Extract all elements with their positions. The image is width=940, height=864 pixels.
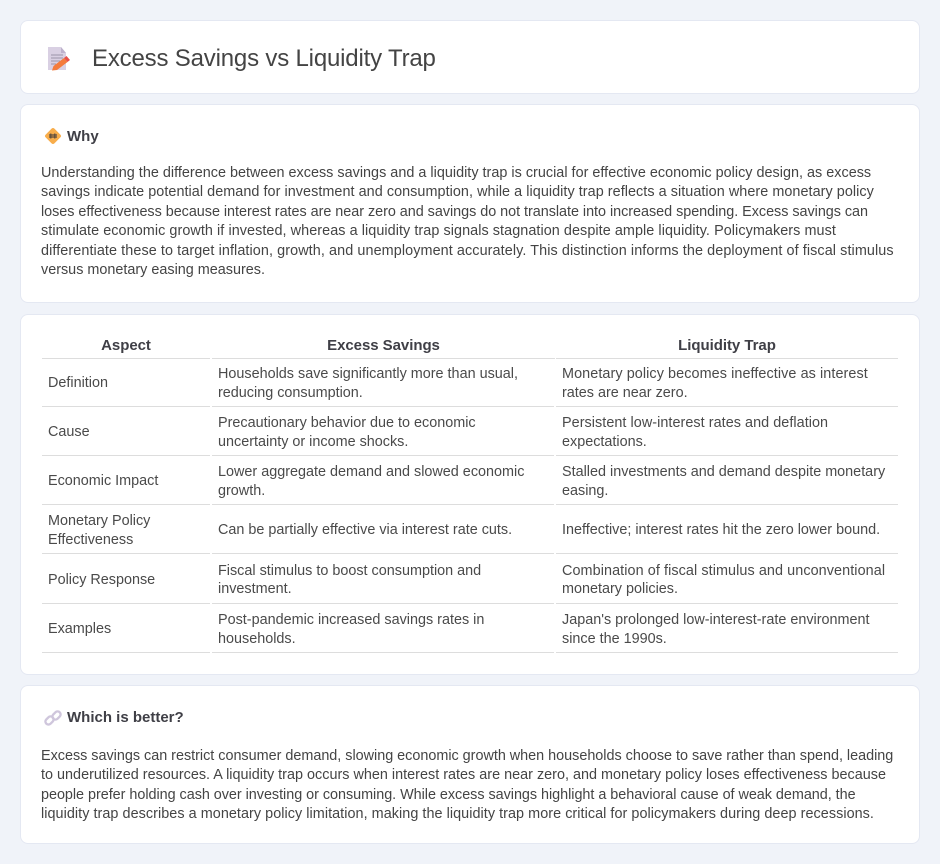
row: cause: Cause <box>48 424 90 440</box>
text block: why explanation: stimulate economic growth if invested, whereas a liquidity trap signals stagnation despite ample liquidity. Policymakers must <box>41 223 836 239</box>
comparison table: households. <box>218 630 296 646</box>
text block: verdict: liquidity trap describes a monetary policy limitation, making the liquidity trap more critical for policymakers during deep recessions. <box>41 806 874 822</box>
comparison table: since the 1990s. <box>562 630 667 646</box>
row: policy response <box>42 554 210 604</box>
text block: why explanation: differentiate these to target inflation, growth, and unemployment accurately. This distinction informs the deployment of fiscal stimulus <box>41 243 894 259</box>
comparison table: Combination of fiscal stimulus and unconventional <box>562 563 885 579</box>
icon: diamond warning sign <box>45 128 61 144</box>
comparison table: Japan's prolonged low-interest-rate environment <box>562 612 870 628</box>
text block: why explanation: savings indicate potential demand for investment and consumption, while a liquidity trap reflects a situation where monetary policy <box>41 184 874 200</box>
comparison table: easing. <box>562 482 608 498</box>
icon: chain link <box>44 710 62 726</box>
comparison table: Can be partially effective via interest rate cuts. <box>218 522 512 538</box>
row: definition: Definition <box>48 375 108 391</box>
row: cause <box>42 407 210 456</box>
text block: why explanation: versus monetary easing measures. <box>41 262 265 278</box>
text block: why explanation <box>41 165 894 278</box>
row: monetary policy effectiveness: Monetary Policy <box>48 513 150 529</box>
panel: header <box>20 20 920 94</box>
table header: excess savings: Excess Savings <box>327 337 440 354</box>
comparison table: monetary policies. <box>562 581 678 597</box>
comparison table <box>42 337 898 653</box>
comparison table: expectations. <box>562 434 647 450</box>
comparison table: reducing consumption. <box>218 384 363 400</box>
text block: verdict: to underutilized resources. A liquidity trap occurs when interest rates are near zero, and monetary policy loses effectiveness because <box>41 767 886 783</box>
row: examples: Examples <box>48 621 111 637</box>
text block: why explanation: loses effectiveness because interest rates are near zero and savings do not translate into increased spending. Excess savings can <box>41 204 868 220</box>
table header: aspect: Aspect <box>101 337 151 354</box>
row: economic impact <box>42 456 210 505</box>
panel: which is better <box>20 685 920 844</box>
comparison table: Stalled investments and demand despite monetary <box>562 464 885 480</box>
comparison table: Post-pandemic increased savings rates in <box>218 612 484 628</box>
text block: verdict: people prefer holding cash over investing or consuming. While excess savings highlight a behavioral cause of weak demand, the <box>41 787 856 803</box>
heading: why: Why <box>67 128 99 145</box>
panel: why <box>20 104 920 303</box>
comparison table: rates are near zero. <box>562 384 688 400</box>
comparison table: Households save significantly more than usual, <box>218 366 518 382</box>
heading: which is better: Which is better? <box>67 709 184 726</box>
text block: verdict <box>41 748 893 822</box>
comparison table: Persistent low-interest rates and deflation <box>562 415 828 431</box>
row: monetary policy effectiveness: Effectiveness <box>48 532 133 548</box>
comparison table: investment. <box>218 581 292 597</box>
table header: liquidity trap: Liquidity Trap <box>678 337 776 354</box>
comparison table: growth. <box>218 482 265 498</box>
comparison table: Fiscal stimulus to boost consumption and <box>218 563 481 579</box>
comparison table: Ineffective; interest rates hit the zero lower bound. <box>562 522 880 538</box>
table header: liquidity trap <box>556 333 898 359</box>
table header: excess savings <box>212 333 555 359</box>
icon: memo with pencil <box>48 47 70 70</box>
comparison table: uncertainty or income shocks. <box>218 434 408 450</box>
row: economic impact: Economic Impact <box>48 473 158 489</box>
text block: verdict: Excess savings can restrict consumer demand, slowing economic growth when households choose to save rather than spend, leading <box>41 748 893 764</box>
table header: aspect <box>42 333 210 359</box>
row: policy response: Policy Response <box>48 572 155 588</box>
comparison table: Monetary policy becomes ineffective as interest <box>562 366 868 382</box>
panel: comparison table <box>20 314 920 675</box>
title: Excess Savings vs Liquidity Trap <box>92 45 436 72</box>
text block: why explanation: Understanding the difference between excess savings and a liquidity trap is crucial for effective economic policy design, as excess <box>41 165 871 181</box>
row: examples <box>42 604 210 653</box>
row: monetary policy effectiveness <box>42 505 210 554</box>
comparison table: Lower aggregate demand and slowed economic <box>218 464 524 480</box>
row: definition <box>42 358 210 407</box>
comparison table: Precautionary behavior due to economic <box>218 415 476 431</box>
